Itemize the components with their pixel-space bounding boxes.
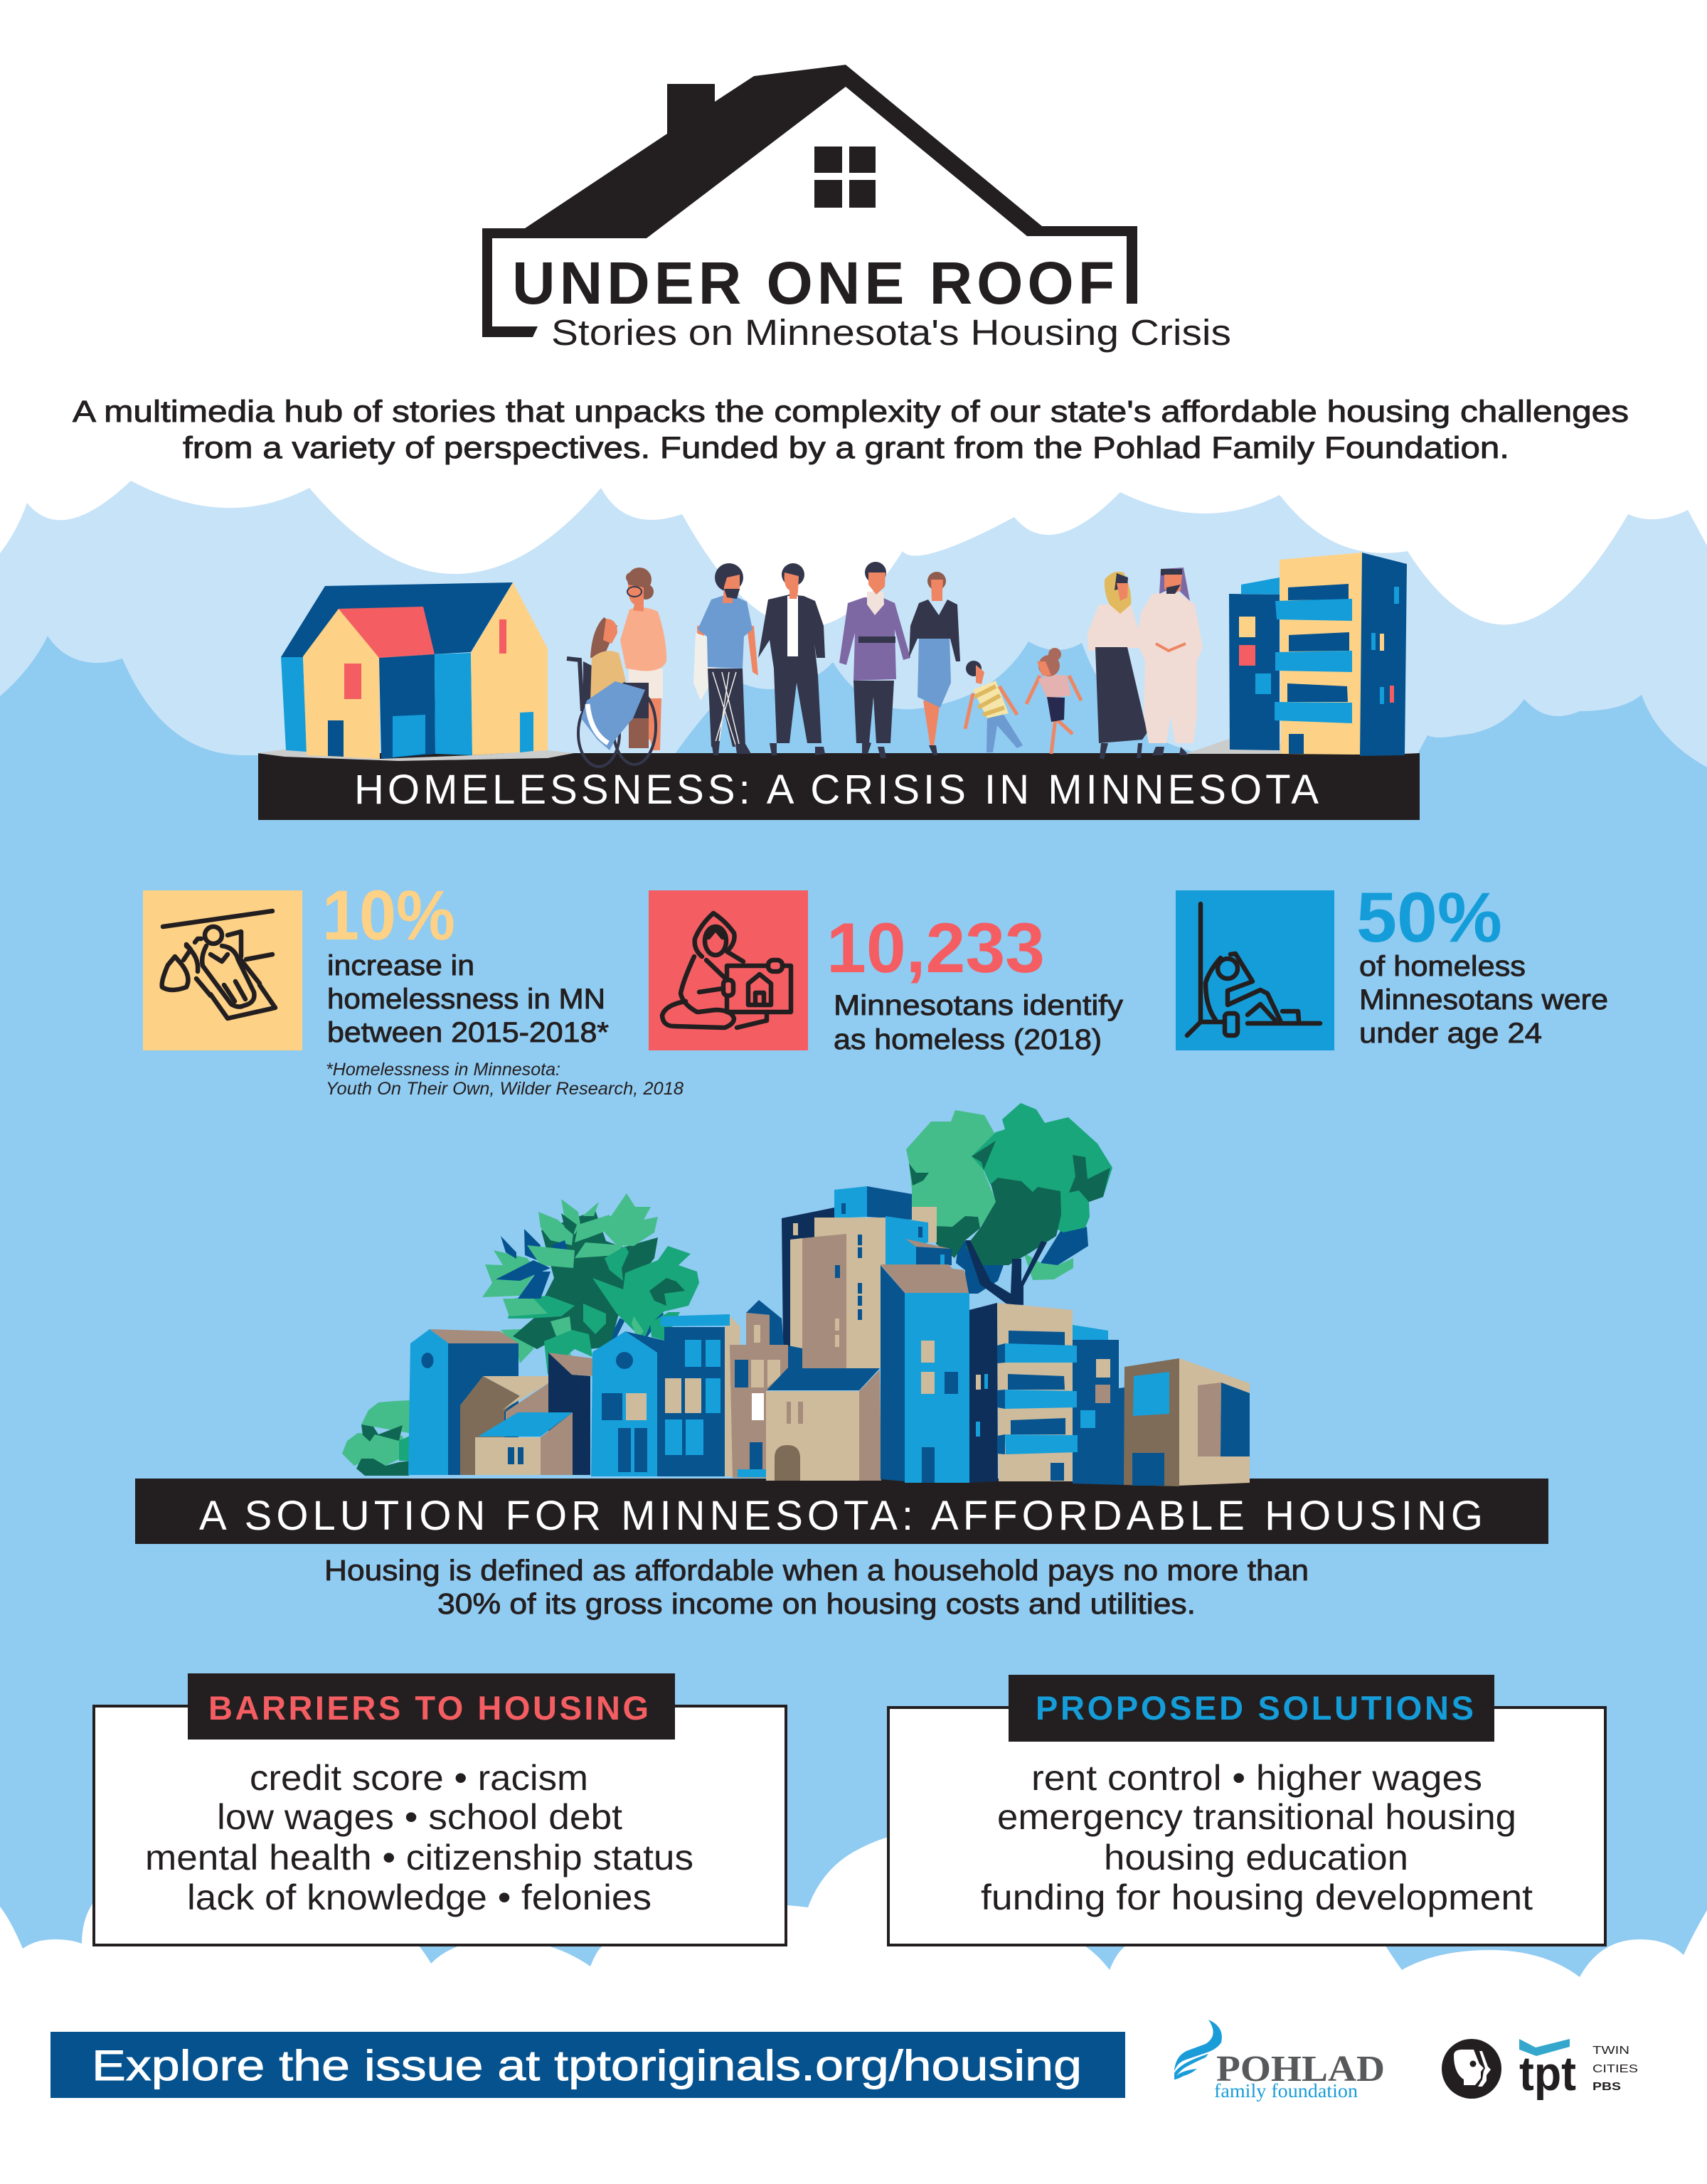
definition text: [324, 1554, 1309, 1620]
logo: tpt Twin Cities PBS: TWIN: [1592, 2045, 1629, 2057]
logo: house roof outline: [482, 65, 1137, 337]
tree: large tree right: [906, 1103, 1112, 1305]
solutions list: emergency transitional housing: [997, 1797, 1516, 1837]
stat description: increase in: [327, 950, 474, 981]
intro text: from a variety of perspectives. Funded by a grant from the Pohlad Family Foundation.: [183, 431, 1509, 465]
barriers heading: BARRIERS TO HOUSING: [208, 1689, 649, 1727]
building cluster: center tower: [730, 1186, 969, 1483]
stat: 50 percent under age 24: [1176, 878, 1608, 1050]
person: woman in headscarf: [1088, 572, 1147, 760]
banner: affordable housing heading: A SOLUTION FOR MINNESOTA: AFFORDABLE HOUSING: [199, 1493, 1483, 1539]
logo: Pohlad Family Foundation: POHLAD: [1216, 2049, 1385, 2089]
logo: tpt Twin Cities PBS: tpt: [1519, 2047, 1576, 2101]
stat description: Minnesotans identify: [834, 990, 1123, 1021]
illustration: family house: [257, 582, 574, 761]
stat description: of homeless: [1359, 951, 1526, 982]
stat: 10,233 Minnesotans: [649, 890, 1123, 1055]
icon: person sitting against wall: [1176, 890, 1334, 1050]
footnote: [326, 1060, 684, 1099]
stat description: as homeless (2018): [834, 1024, 1102, 1055]
solutions heading: PROPOSED SOLUTIONS: [1036, 1689, 1474, 1727]
intro text: [73, 395, 1629, 465]
logo: PBS head: [1442, 2039, 1501, 2099]
person: man in dark suit: [758, 563, 825, 755]
solutions heading: [1009, 1675, 1494, 1742]
solutions list: funding for housing development: [981, 1877, 1533, 1917]
stat description: [834, 990, 1123, 1055]
illustration: apartment building: [1186, 553, 1420, 756]
barriers list: lack of knowledge • felonies: [187, 1877, 652, 1917]
logo: Pohlad Family Foundation: [1174, 2020, 1385, 2102]
building cluster: right balconies: [969, 1303, 1250, 1486]
solutions list: housing education: [1104, 1838, 1408, 1877]
stat description: Minnesotans were: [1359, 984, 1608, 1016]
illustration: people group: [567, 562, 1203, 767]
intro text: A multimedia hub of stories that unpacks the complexity of our state's affordable housing challenges: [73, 395, 1629, 429]
building cluster: left: [408, 1314, 740, 1476]
panel: proposed solutions: [888, 1675, 1605, 1945]
barriers list: low wages • school debt: [217, 1797, 622, 1837]
banner: affordable housing heading: [135, 1479, 1548, 1544]
icon: hooded person with house sign: [649, 890, 808, 1050]
solutions list: [981, 1758, 1533, 1917]
footnote: Youth On Their Own, Wilder Research, 2018: [326, 1079, 684, 1099]
call to action bar: [50, 2032, 1125, 2098]
person: man in white thobe: [1136, 568, 1203, 755]
stat description: under age 24: [1359, 1018, 1542, 1049]
logo: tpt Twin Cities PBS: PBS: [1592, 2081, 1621, 2093]
stat description: between 2015-2018*: [327, 1017, 609, 1048]
illustration: city of affordable housing: [342, 1103, 1250, 1486]
barriers heading: [188, 1673, 675, 1740]
logo: Pohlad Family Foundation: family foundation: [1214, 2080, 1358, 2102]
tree: leafy tree left: [482, 1193, 699, 1376]
person: caregiver and wheelchair user: [567, 568, 666, 767]
person: woman in blue skirt: [909, 572, 960, 755]
person: girl in pink top: [1026, 648, 1081, 754]
definition text: Housing is defined as affordable when a household pays no more than: [324, 1554, 1309, 1587]
panel: barriers to housing: [94, 1673, 786, 1945]
background: bottom white cloud: [0, 1837, 1707, 2184]
bush: [342, 1400, 410, 1476]
person: man in purple jacket: [839, 562, 910, 758]
barriers list: mental health • citizenship status: [145, 1838, 693, 1877]
logo: tpt Twin Cities PBS: [1519, 2039, 1638, 2101]
icon: person lying on mat: [143, 890, 302, 1050]
stat number: 10,233: [826, 908, 1045, 987]
solutions list: rent control • higher wages: [1031, 1758, 1482, 1798]
stat: 10 percent increase: [143, 875, 684, 1099]
person: boy in striped shirt: [965, 661, 1023, 752]
stat description: [1359, 951, 1608, 1049]
person: man in blue shirt: [693, 563, 758, 755]
logo: tpt Twin Cities PBS: CITIES: [1592, 2063, 1638, 2075]
stat number: 10%: [322, 875, 455, 954]
call to action bar: Explore the issue at tptoriginals.org/housing: [92, 2042, 1082, 2089]
stat number: 50%: [1356, 878, 1502, 957]
background: light blue cloud layer: [0, 481, 1707, 2184]
title: UNDER ONE ROOF: [512, 250, 1115, 316]
barriers list: credit score • racism: [250, 1758, 588, 1798]
stat description: [327, 950, 609, 1048]
background: mid blue cloud layer: [0, 636, 1707, 2184]
stat description: homelessness in MN: [327, 984, 605, 1015]
banner: homelessness heading: HOMELESSNESS: A CRISIS IN MINNESOTA: [354, 767, 1319, 813]
barriers list: [145, 1758, 693, 1917]
footnote: *Homelessness in Minnesota:: [326, 1060, 560, 1080]
banner: homelessness heading: [258, 753, 1420, 820]
definition text: 30% of its gross income on housing costs and utilities.: [437, 1587, 1196, 1620]
subtitle: Stories on Minnesota's Housing Crisis: [551, 312, 1231, 353]
